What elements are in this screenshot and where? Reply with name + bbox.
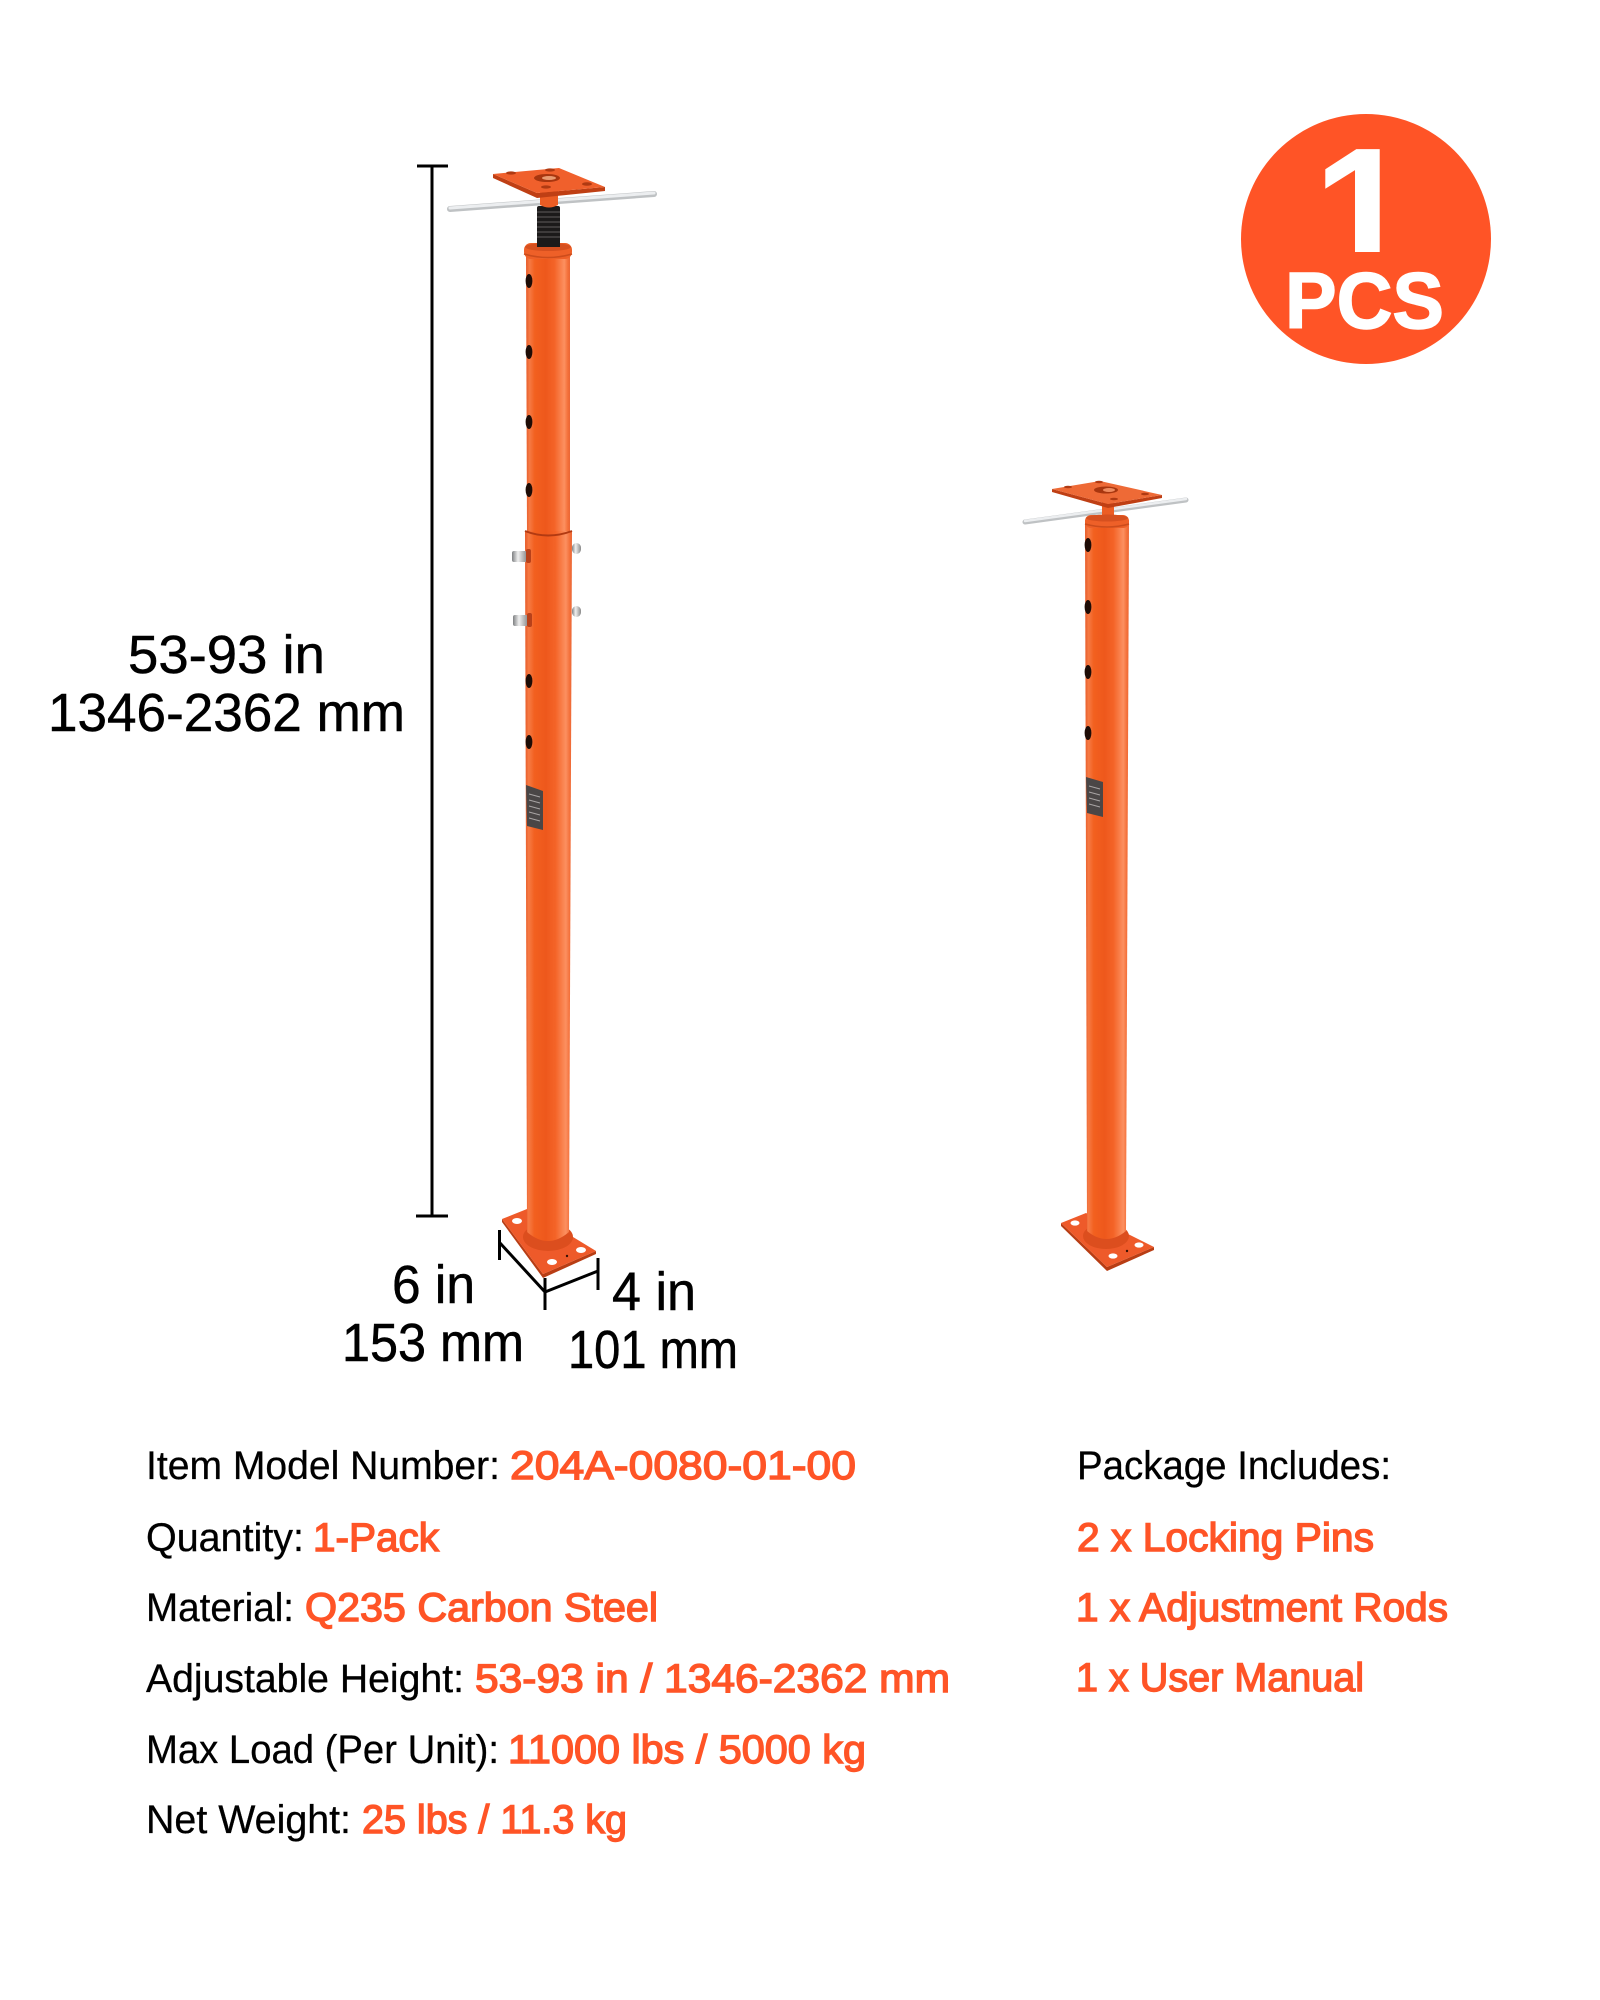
badge unit: PCS bbox=[1285, 256, 1444, 345]
base depth label: 101 mm bbox=[568, 1320, 738, 1380]
max load: 11000 lbs / 5000 kg bbox=[508, 1728, 866, 1772]
quantity: Quantity: bbox=[146, 1516, 304, 1560]
base depth label: 4 in bbox=[612, 1262, 696, 1322]
max load bbox=[146, 1728, 866, 1772]
adjustable height bbox=[146, 1657, 950, 1701]
adjustable height: Adjustable Height: bbox=[146, 1657, 464, 1701]
specifications list bbox=[146, 1444, 950, 1842]
material: Material: bbox=[146, 1586, 294, 1630]
base width label: 153 mm bbox=[342, 1313, 524, 1373]
locking pins item: 2 x Locking Pins bbox=[1077, 1516, 1374, 1560]
threaded screw bbox=[537, 206, 560, 248]
lower tube bbox=[525, 531, 572, 1241]
adjustment rods item: 1 x Adjustment Rods bbox=[1076, 1586, 1448, 1630]
specification label bbox=[1086, 777, 1103, 817]
height dimension label: 53-93 in bbox=[128, 625, 325, 685]
base width label: 6 in bbox=[392, 1255, 475, 1315]
material: Q235 Carbon Steel bbox=[305, 1586, 658, 1630]
net weight bbox=[146, 1798, 627, 1842]
tube holes bbox=[1085, 538, 1091, 740]
neck bbox=[540, 190, 558, 208]
model number: Item Model Number: bbox=[146, 1444, 500, 1488]
base plate bbox=[1061, 1213, 1154, 1271]
material bbox=[146, 1586, 658, 1630]
adjustment rod bbox=[1025, 499, 1186, 522]
quantity bbox=[146, 1516, 440, 1560]
package heading: Package Includes: bbox=[1077, 1444, 1391, 1488]
tube joint bbox=[525, 531, 572, 536]
model number: 204A-0080-01-00 bbox=[510, 1444, 856, 1488]
retracted support column bbox=[1025, 481, 1186, 1271]
model number bbox=[146, 1444, 856, 1488]
upper tube bbox=[526, 252, 570, 536]
tube bbox=[1085, 522, 1129, 1239]
base flange bbox=[523, 1223, 573, 1251]
base plate bbox=[502, 1209, 596, 1278]
quantity: 1-Pack bbox=[313, 1516, 440, 1560]
collar bbox=[524, 240, 572, 259]
height dimension line bbox=[416, 166, 448, 1216]
height dimension label bbox=[48, 625, 405, 743]
user manual item: 1 x User Manual bbox=[1076, 1656, 1364, 1700]
net weight: 25 lbs / 11.3 kg bbox=[362, 1798, 627, 1842]
lower tube holes bbox=[526, 674, 532, 749]
adjustment rod bbox=[450, 193, 654, 209]
max load: Max Load (Per Unit): bbox=[146, 1728, 499, 1772]
neck bbox=[1102, 500, 1114, 515]
base dimension lines bbox=[500, 1230, 598, 1310]
top plate bbox=[1052, 481, 1162, 508]
adjustable height: 53-93 in / 1346-2362 mm bbox=[475, 1657, 950, 1701]
height dimension label: 1346-2362 mm bbox=[48, 683, 405, 743]
base depth label bbox=[568, 1262, 738, 1380]
base width label bbox=[342, 1255, 524, 1373]
package includes list bbox=[1076, 1444, 1448, 1700]
specification label bbox=[526, 785, 543, 830]
base flange bbox=[1083, 1223, 1129, 1249]
upper tube holes bbox=[526, 274, 532, 497]
net weight: Net Weight: bbox=[146, 1798, 351, 1842]
extended support column bbox=[450, 168, 654, 1278]
top plate bbox=[493, 168, 605, 198]
collar bbox=[1085, 514, 1129, 528]
quantity badge bbox=[1241, 111, 1491, 364]
badge number: 1 bbox=[1313, 111, 1413, 312]
locking pins bbox=[512, 543, 581, 627]
